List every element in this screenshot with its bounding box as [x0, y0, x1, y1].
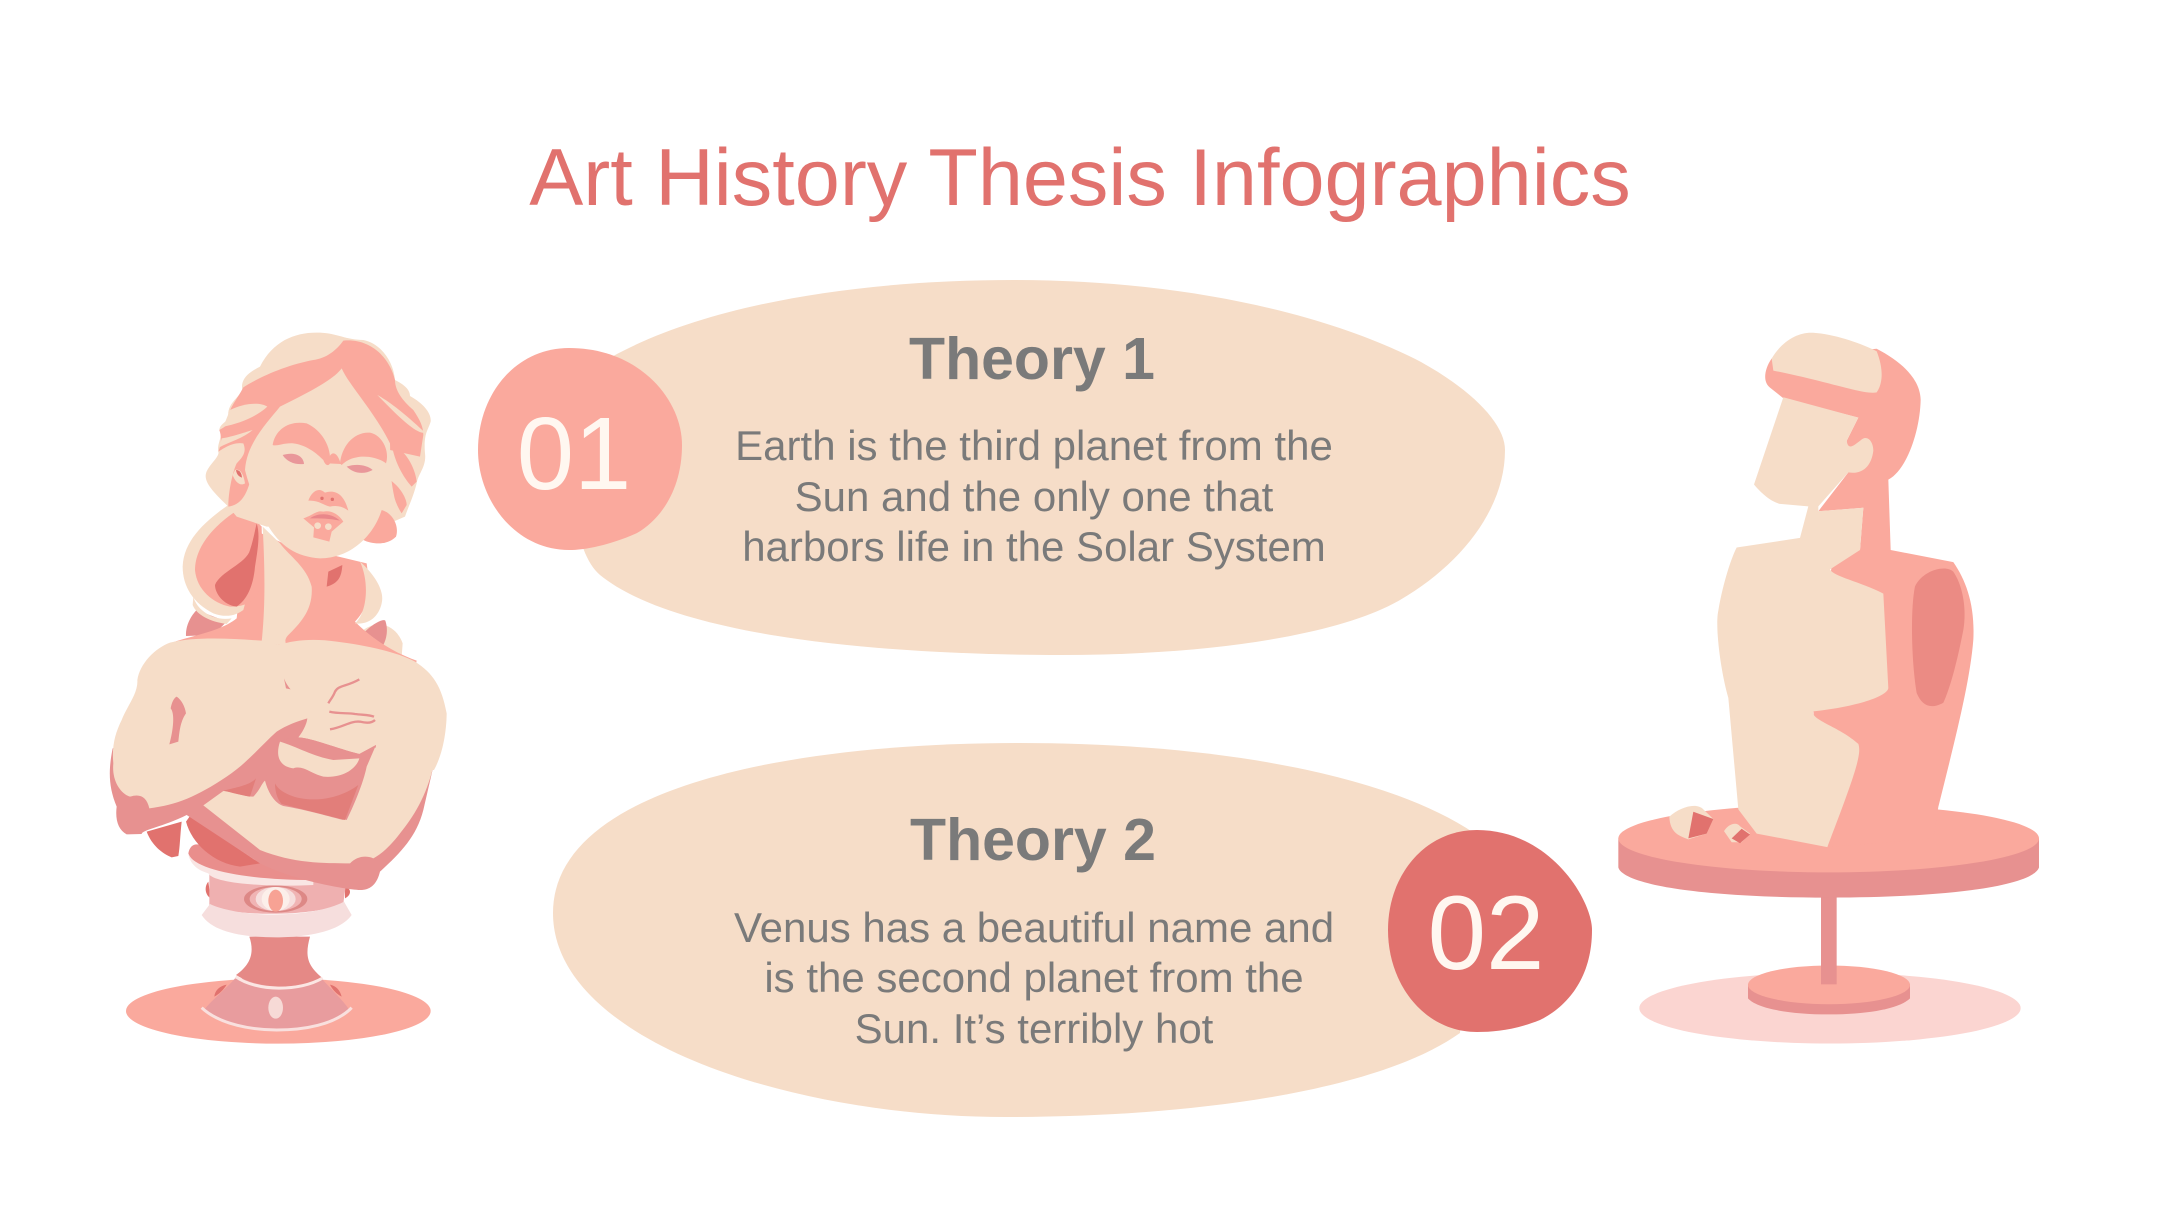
badge 02: 02 — [1428, 875, 1544, 992]
bust torso — [110, 639, 447, 890]
illustration: broken sculpture on a table — [1618, 333, 2039, 1044]
theory 1 blob — [572, 280, 1505, 655]
panel: theory 2 — [553, 743, 1592, 1117]
table base — [1748, 887, 1910, 1014]
hair ribbons behind the shoulders — [170, 527, 417, 677]
theory 2 body text: Venus has a beautiful name and — [734, 904, 1334, 951]
badge 02 — [1388, 830, 1592, 1032]
theory 2 heading: Theory 2 — [910, 807, 1156, 873]
title: Art History Thesis Infographics — [529, 133, 1631, 223]
theory 1 body text: Earth is the third planet from the — [735, 422, 1333, 469]
theory 1 body text: harbors life in the Solar System — [742, 523, 1326, 570]
theory 2 body text: is the second planet from the — [764, 954, 1304, 1001]
badge 01: 01 — [517, 396, 631, 511]
sculpture salmon side — [1765, 349, 1974, 847]
badge 01 — [478, 348, 682, 550]
theory 2 blob — [553, 743, 1474, 1117]
bust head and hair — [183, 333, 431, 650]
theory 2 body text — [734, 904, 1334, 1052]
table top — [1618, 804, 2039, 898]
floor shadow — [1639, 973, 2021, 1044]
theory 2 body text: Sun. It’s terribly hot — [855, 1005, 1214, 1052]
rubble pieces — [1669, 806, 1750, 843]
theory 1 body text: Sun and the only one that — [795, 473, 1274, 520]
bust pedestal — [126, 844, 431, 1044]
illustration: classical female bust — [110, 333, 447, 1044]
theory 1 heading: Theory 1 — [909, 326, 1155, 392]
sculpture beige side — [1717, 333, 1888, 847]
panel: theory 1 — [478, 280, 1505, 655]
theory 1 body text — [735, 422, 1333, 570]
